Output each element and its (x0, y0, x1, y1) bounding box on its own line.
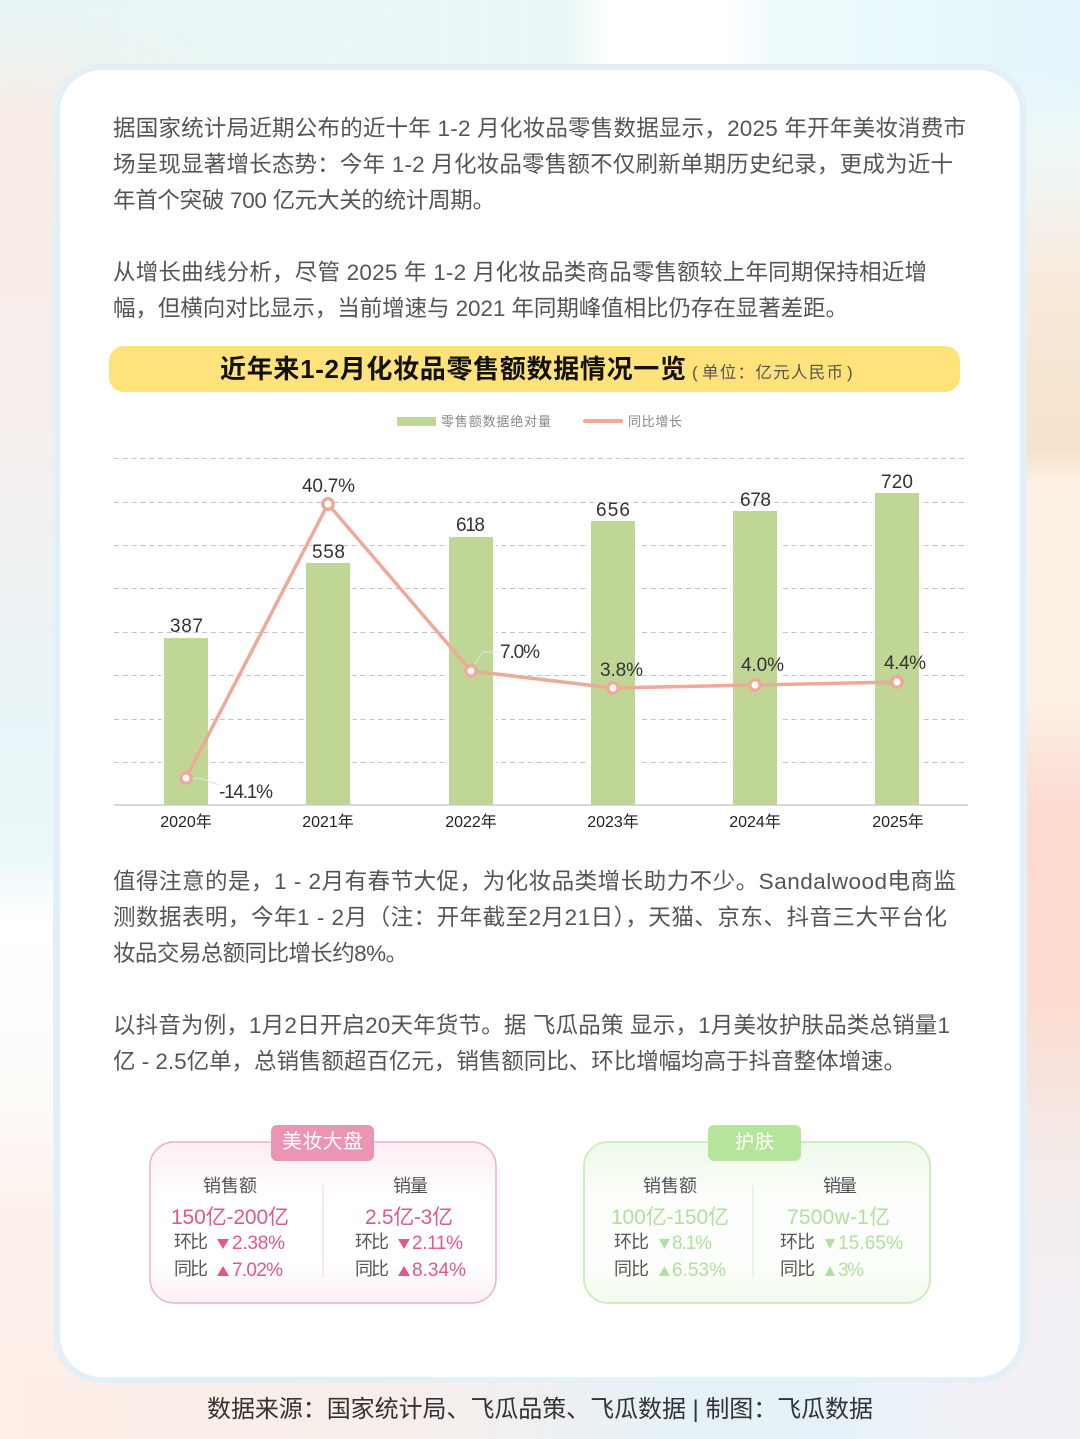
chart legend (397, 414, 682, 429)
combo chart: retail sales bars and year-on-year line: 387 (170, 616, 203, 637)
combo chart: retail sales bars and year-on-year line: 2022年 (445, 813, 497, 831)
combo chart: retail sales bars and year-on-year line: -14.1% (219, 782, 273, 803)
combo chart: retail sales bars and year-on-year line: 4.4% (884, 653, 926, 674)
chart title banner: ( (692, 363, 698, 382)
combo chart: retail sales bars and year-on-year line: 2021年 (302, 813, 354, 831)
stats: beauty sales volume: 同比 (355, 1259, 389, 1279)
chart title banner (109, 346, 960, 392)
text block: intro paragraph (113, 116, 966, 213)
stats: beauty sales value: 同比 (174, 1259, 208, 1279)
stats: beauty sales value: 销售额 (203, 1176, 257, 1196)
stats: skincare sales volume: 3% (838, 1260, 864, 1281)
panel: beauty market stats (150, 1125, 496, 1303)
chart legend: 零售额数据绝对量 (441, 414, 551, 429)
stats: skincare sales value: 100亿-150亿 (611, 1206, 729, 1229)
stats: beauty sales volume (355, 1176, 466, 1281)
stats: beauty sales value: 7.02% (232, 1260, 283, 1281)
text block: Sandalwood paragraph: 妆品交易总额同比增长约8%。 (113, 941, 408, 966)
stats: beauty sales volume: 销量 (393, 1176, 428, 1196)
stats: skincare sales volume: 销量 (823, 1176, 857, 1196)
text block: intro paragraph: 场呈现显著增长态势：今年 1-2 月化妆品零售额不仅刷新单期历史纪录，更成为近十 (113, 152, 953, 177)
text block: intro paragraph: 据国家统计局近期公布的近十年 1-2 月化妆品零售数据显示，2025 年开年美妆消费市 (113, 116, 966, 141)
stats: skincare sales volume: 同比 (780, 1259, 815, 1279)
chart title banner: ) (847, 363, 853, 382)
chart title banner: 近年来1-2月化妆品零售额数据情况一览 (220, 354, 686, 384)
text block: Douyin paragraph: 亿 - 2.5亿单，总销售额超百亿元，销售额同比、环比增幅均高于抖音整体增速。 (113, 1049, 906, 1074)
footer: data source: 数据来源：国家统计局、飞瓜品策、飞瓜数据 | 制图：飞瓜数据 (207, 1396, 873, 1423)
stats: beauty sales volume: 2.5亿-3亿 (365, 1206, 453, 1229)
stats: skincare sales volume: 环比 (780, 1232, 815, 1252)
text block: growth analysis paragraph (113, 260, 927, 321)
text block: Douyin paragraph: 以抖音为例，1月2日开启20天年货节。据 飞瓜品策 显示，1月美妆护肤品类总销量1 (113, 1013, 950, 1038)
panel: skincare stats (584, 1125, 930, 1303)
combo chart: retail sales bars and year-on-year line: 2023年 (587, 813, 639, 831)
stats: skincare sales value: 8.1% (672, 1233, 712, 1254)
stats: skincare sales value: 环比 (614, 1232, 649, 1252)
tag: skincare (708, 1125, 801, 1161)
stats: skincare sales value (611, 1176, 729, 1281)
combo chart: retail sales bars and year-on-year line: 656 (596, 500, 630, 521)
stats: beauty sales value: 环比 (174, 1232, 208, 1252)
stats: skincare sales volume (780, 1176, 903, 1281)
text block: Sandalwood paragraph: 测数据表明，今年1 - 2月（注：开年截至2月21日），天猫、京东、抖音三大平台化 (113, 905, 947, 930)
text block: Sandalwood paragraph: 值得注意的是，1 - 2月有春节大促，为化妆品类增长助力不少。Sandalwood电商监 (113, 869, 956, 894)
combo chart: retail sales bars and year-on-year line (114, 458, 968, 831)
combo chart: retail sales bars and year-on-year line: 720 (881, 472, 913, 493)
stats: skincare sales volume: 15.65% (838, 1233, 903, 1254)
combo chart: retail sales bars and year-on-year line: 618 (456, 515, 485, 536)
combo chart: retail sales bars and year-on-year line: 3.8% (600, 660, 643, 681)
text block: growth analysis paragraph: 从增长曲线分析，尽管 2025 年 1-2 月化妆品类商品零售额较上年同期保持相近增 (113, 260, 927, 285)
stats: beauty sales volume: 环比 (355, 1232, 389, 1252)
stats: skincare sales value: 销售额 (643, 1176, 697, 1196)
stats: skincare sales value: 同比 (614, 1259, 649, 1279)
combo chart: retail sales bars and year-on-year line: 7.0% (500, 642, 540, 663)
stats: beauty sales value: 150亿-200亿 (171, 1206, 289, 1229)
tag: beauty market (271, 1125, 374, 1161)
stats: beauty sales volume: 2.11% (412, 1233, 463, 1254)
stats: beauty sales value (171, 1176, 289, 1281)
stats: skincare sales value: 6.53% (672, 1260, 726, 1281)
tag: skincare: 护肤 (735, 1131, 774, 1153)
text block: growth analysis paragraph: 幅，但横向对比显示，当前增速与 2021 年同期峰值相比仍存在显著差距。 (113, 296, 848, 321)
combo chart: retail sales bars and year-on-year line: 2020年 (160, 813, 212, 831)
text block: intro paragraph: 年首个突破 700 亿元大关的统计周期。 (113, 188, 495, 213)
combo chart: retail sales bars and year-on-year line: 2024年 (729, 813, 781, 831)
combo chart: retail sales bars and year-on-year line: 4.0% (741, 655, 784, 676)
stats: beauty sales volume: 8.34% (412, 1260, 466, 1281)
text block: Douyin paragraph (113, 1013, 950, 1074)
chart title banner: 单位：亿元人民币 (702, 363, 843, 382)
combo chart: retail sales bars and year-on-year line: 558 (312, 542, 345, 563)
stats: beauty sales value: 2.38% (232, 1233, 285, 1254)
combo chart: retail sales bars and year-on-year line: 2025年 (872, 813, 924, 831)
combo chart: retail sales bars and year-on-year line: 40.7% (302, 476, 355, 497)
chart legend: 同比增长 (628, 414, 682, 429)
stats: skincare sales volume: 7500w-1亿 (787, 1206, 890, 1229)
tag: beauty market: 美妆大盘 (282, 1130, 363, 1153)
combo chart: retail sales bars and year-on-year line: 678 (740, 490, 771, 511)
text block: Sandalwood paragraph (113, 869, 956, 966)
